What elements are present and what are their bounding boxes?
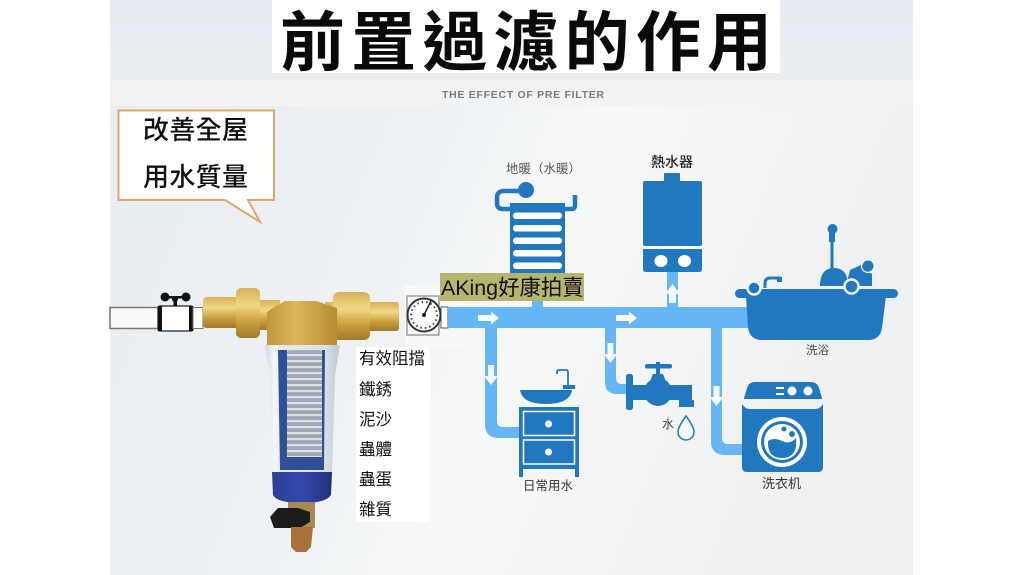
list patch (356, 347, 430, 522)
up arrow in heater pipe (665, 284, 680, 303)
callout: improve water quality: 改善全屋 (143, 115, 248, 145)
inlet pipe (110, 306, 203, 331)
water pipes (448, 272, 752, 455)
blue cap (272, 472, 332, 503)
blue inner core (278, 350, 325, 470)
label: water drop: 水 (662, 417, 674, 431)
label: water heater: 熱水器 (651, 154, 693, 170)
subtitle: THE EFFECT OF PRE FILTER (442, 89, 604, 101)
title: 前置過濾的作用 (280, 6, 772, 79)
text list: blocked impurities (359, 349, 425, 519)
label: daily water: 日常用水 (523, 479, 574, 493)
label: water drop (662, 416, 694, 440)
icon: pressure gauge (407, 296, 448, 335)
label: floor heating: 地暖（水暖） (506, 162, 581, 176)
AKing label: AKing好康拍賣 (441, 276, 584, 300)
icon: bathtub (735, 224, 898, 340)
icon: floor heating radiator (497, 182, 575, 274)
callout: improve water quality (118, 110, 274, 222)
text list: blocked impurities: 有效阻擋 (359, 349, 425, 368)
gauge patch (405, 285, 465, 347)
icon: sink cabinet (519, 370, 579, 477)
flow arrows (478, 312, 724, 406)
icon: inlet valve handle (160, 292, 190, 306)
text list: blocked impurities: 雜質 (359, 500, 392, 519)
text list: blocked impurities: 蟲蛋 (359, 470, 392, 489)
text list: blocked impurities: 蟲體 (359, 440, 392, 459)
callout: improve water quality: 用水質量 (143, 162, 248, 192)
text list: blocked impurities: 鐵銹 (359, 380, 392, 399)
mesh cartridge (287, 350, 322, 457)
icon: water tap (626, 362, 694, 410)
background panel (110, 0, 913, 575)
text list: blocked impurities: 泥沙 (359, 410, 392, 429)
brass pre-filter (203, 288, 399, 552)
label: washing machine: 洗衣机 (762, 476, 801, 491)
drain ball valve (288, 502, 315, 528)
icon: washing machine (742, 382, 823, 472)
filter cup (265, 345, 340, 473)
icon: water heater (643, 173, 702, 272)
label: bath: 洗浴 (806, 344, 829, 357)
